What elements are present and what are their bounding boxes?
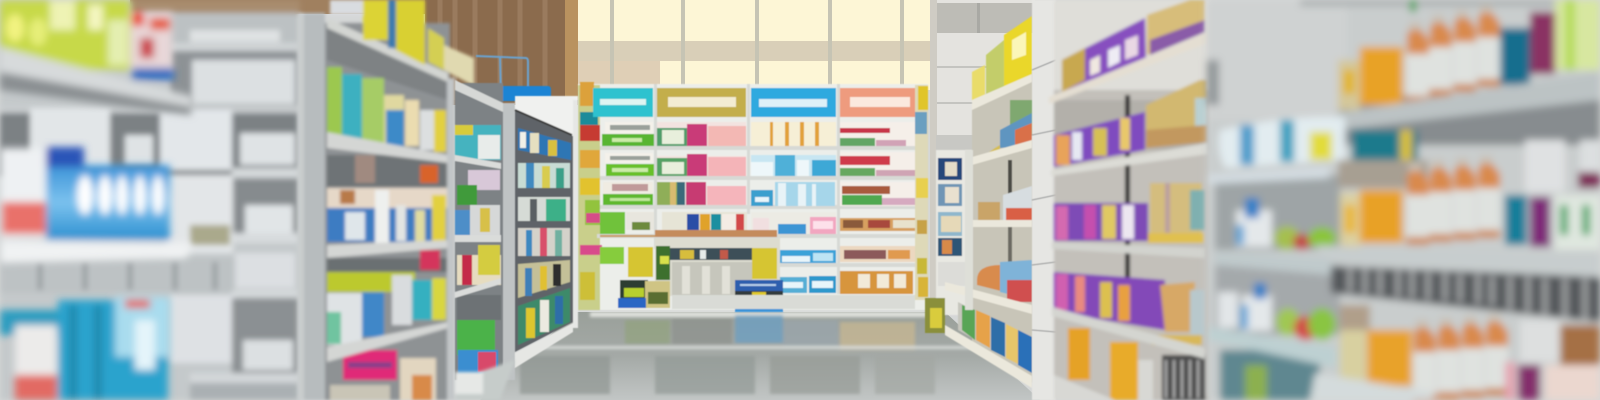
- window: [578, 0, 930, 91]
- bay 1 row 2: [327, 155, 448, 244]
- row 2 purple: [1054, 80, 1207, 167]
- fourth row products: [977, 260, 1032, 302]
- row 4 purple: [1054, 272, 1205, 345]
- column 2 products: [657, 122, 747, 234]
- yellow panels: [628, 247, 777, 279]
- white column: [1032, 0, 1056, 400]
- row 2 products: [1338, 140, 1600, 250]
- row 3 purple: [1054, 183, 1205, 243]
- sign: teal: [593, 88, 653, 117]
- bay shelves: [1208, 167, 1336, 368]
- green and blue stack: [618, 280, 670, 308]
- green bottles: [0, 0, 130, 70]
- row 1 products: [1338, 0, 1600, 110]
- bay 1 row 4: [330, 350, 436, 400]
- left aisle back fixture: [0, 0, 300, 400]
- bottom blue bottles: [0, 297, 170, 400]
- bay 2 shelves: [455, 155, 501, 298]
- bottom white and red box: [15, 325, 57, 400]
- row 5 boxes: [1068, 328, 1206, 400]
- floor: [480, 312, 1040, 400]
- bay 1 row 3: [327, 250, 448, 345]
- center display wall: [578, 82, 928, 312]
- column 1 products: [600, 122, 655, 237]
- left near shelf products (blurred): [0, 0, 195, 400]
- top products: [972, 16, 1032, 108]
- right end column: [915, 85, 928, 300]
- fifth row products: [958, 302, 1032, 373]
- shelves and dividers: [597, 84, 920, 294]
- row a: [515, 110, 572, 160]
- row d: [518, 228, 570, 256]
- blue pallet stack: [735, 280, 783, 312]
- near shelf 1: [0, 47, 195, 107]
- row e: [518, 260, 570, 298]
- row 1 purple: [1062, 0, 1205, 92]
- wood counter: [655, 230, 777, 237]
- low-floor fixtures at bottom of left aisle: [455, 360, 515, 400]
- base plinth: [672, 295, 915, 309]
- lower products row: [655, 238, 780, 296]
- tile wall right of window: [930, 0, 1036, 300]
- shelves: [945, 74, 1032, 388]
- upper yellow products: [330, 0, 474, 86]
- row b: [518, 163, 570, 188]
- bay products: bottles and green fruit upper: [1236, 198, 1336, 250]
- small right fixture behind: [925, 150, 972, 333]
- bay 1 row 1: [327, 67, 446, 152]
- near shelf 2: [0, 240, 191, 263]
- near bay: upright post and products: [298, 0, 474, 400]
- sign: olive: [657, 88, 746, 117]
- post 1: [298, 13, 325, 400]
- sign: blue: [751, 88, 836, 117]
- blue sign: [478, 86, 551, 101]
- white and pink bottle: [0, 148, 46, 238]
- row 3 products: [1340, 305, 1600, 400]
- bay 3 dark shelving with colourful products: [515, 96, 578, 368]
- left end column of products: [578, 82, 625, 310]
- wire rack: [476, 56, 528, 98]
- sign: salmon: [839, 88, 919, 117]
- shelf: right bottom: [1310, 373, 1433, 400]
- red bottles: [130, 12, 174, 80]
- shelves: [1049, 32, 1208, 400]
- column 3 products: [751, 122, 836, 293]
- bay 2 and wire rack: [455, 56, 551, 380]
- bay 1 shelves: [327, 132, 448, 362]
- bay 3 base: [515, 323, 573, 368]
- third row products: [978, 186, 1032, 220]
- row f: [518, 288, 570, 345]
- far-right blurred shelving: [1207, 0, 1600, 400]
- post 2: [447, 78, 455, 400]
- second row products: [978, 113, 1032, 162]
- row c: [518, 197, 570, 221]
- shelf: right top: [1336, 72, 1600, 130]
- right shelving unit A (mid focus): [945, 16, 1036, 388]
- shelf: right middle: [1315, 245, 1600, 278]
- bay products: white-blue roll: [1219, 117, 1418, 168]
- dark band: [1331, 266, 1600, 322]
- column 4 products: [840, 122, 918, 294]
- right shelving unit B (purple products): [1049, 0, 1210, 400]
- blue bottles: [46, 147, 170, 240]
- bay products: bottles and green fruit lower: [1218, 283, 1336, 340]
- bay 2 products: [455, 125, 501, 375]
